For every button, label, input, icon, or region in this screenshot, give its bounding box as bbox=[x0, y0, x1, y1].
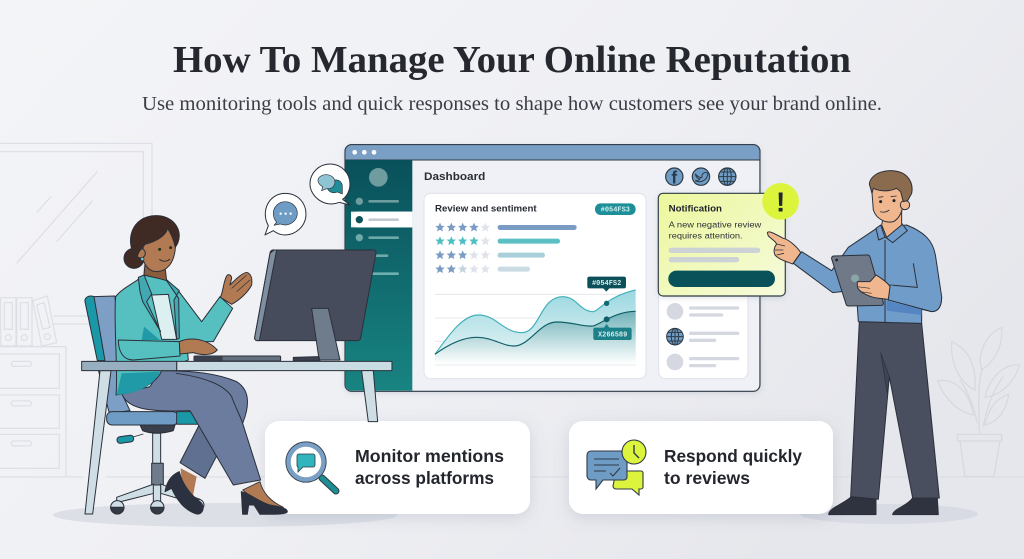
icon: magnifier bbox=[286, 442, 336, 491]
hands bbox=[179, 272, 252, 355]
icon: alert badge bbox=[762, 183, 799, 220]
office backdrop: window, binders, cabinet, floor bbox=[0, 143, 1024, 477]
trouser crease bbox=[881, 353, 889, 393]
trousers bbox=[851, 322, 939, 499]
card text: Monitor mentions bbox=[355, 446, 504, 466]
speech bubble: chat bbox=[310, 164, 350, 205]
speech bubble: typing bbox=[265, 193, 306, 235]
shoes bbox=[829, 497, 938, 515]
head and hair bbox=[869, 171, 912, 222]
notification message: A new negative review bbox=[669, 219, 762, 229]
card: respond quickly bbox=[569, 421, 833, 514]
card text: Respond quickly bbox=[664, 446, 802, 466]
social icons: f bbox=[671, 167, 677, 187]
chair bbox=[85, 296, 204, 514]
star rating rows bbox=[435, 223, 577, 273]
card: monitor mentions bbox=[265, 421, 530, 514]
tooltip bottom: X266589 bbox=[598, 331, 627, 339]
sentiment area chart bbox=[435, 277, 636, 365]
card text: across platforms bbox=[355, 468, 494, 488]
pointing hand bbox=[767, 232, 801, 264]
social icons bbox=[666, 167, 736, 187]
subtitle: Use monitoring tools and quick responses to shape how customers see your brand online. bbox=[142, 93, 882, 115]
panel: review and sentiment card bbox=[424, 193, 646, 379]
neck bbox=[882, 210, 902, 237]
notification message: requires attention. bbox=[669, 230, 743, 240]
tooltip top bbox=[587, 277, 626, 292]
tooltip top: #054FS2 bbox=[592, 280, 621, 288]
card text: to reviews bbox=[664, 468, 750, 488]
back leg and shoe bbox=[165, 423, 223, 514]
tooltip bottom bbox=[593, 324, 632, 340]
shirt bbox=[793, 223, 942, 323]
sidebar bbox=[345, 160, 412, 391]
card heading: Review and sentiment bbox=[435, 204, 537, 214]
icon: alert badge: ! bbox=[776, 186, 785, 217]
head and hair bbox=[124, 216, 179, 281]
tablet bbox=[832, 255, 883, 306]
keyboard bbox=[194, 356, 281, 361]
monitor bbox=[255, 250, 376, 361]
illustration: man with tablet bbox=[767, 171, 942, 515]
jacket bbox=[115, 275, 233, 395]
floor shadow: woman bbox=[53, 503, 397, 527]
panel: activity list bbox=[659, 240, 748, 379]
floor shadow: man bbox=[800, 504, 978, 524]
plant bbox=[938, 328, 1019, 477]
panel: notification bbox=[658, 193, 785, 296]
title: How To Manage Your Online Reputation bbox=[173, 39, 851, 81]
icon: speech bubbles and clock bbox=[587, 440, 646, 495]
front leg, pants bbox=[122, 371, 261, 485]
illustration: woman at desk bbox=[82, 164, 392, 514]
front shoe bbox=[241, 482, 287, 514]
window title bar bbox=[345, 145, 760, 160]
panel: dashboard window bbox=[345, 145, 799, 391]
notification heading: Notification bbox=[669, 204, 722, 214]
tag bbox=[595, 203, 636, 215]
tablet hand bbox=[857, 275, 890, 299]
tag: #054FS3 bbox=[601, 206, 630, 214]
desk top bbox=[82, 361, 392, 371]
desk legs bbox=[85, 371, 111, 514]
desk right leg bbox=[362, 371, 378, 422]
dashboard heading: Dashboard bbox=[424, 171, 485, 183]
